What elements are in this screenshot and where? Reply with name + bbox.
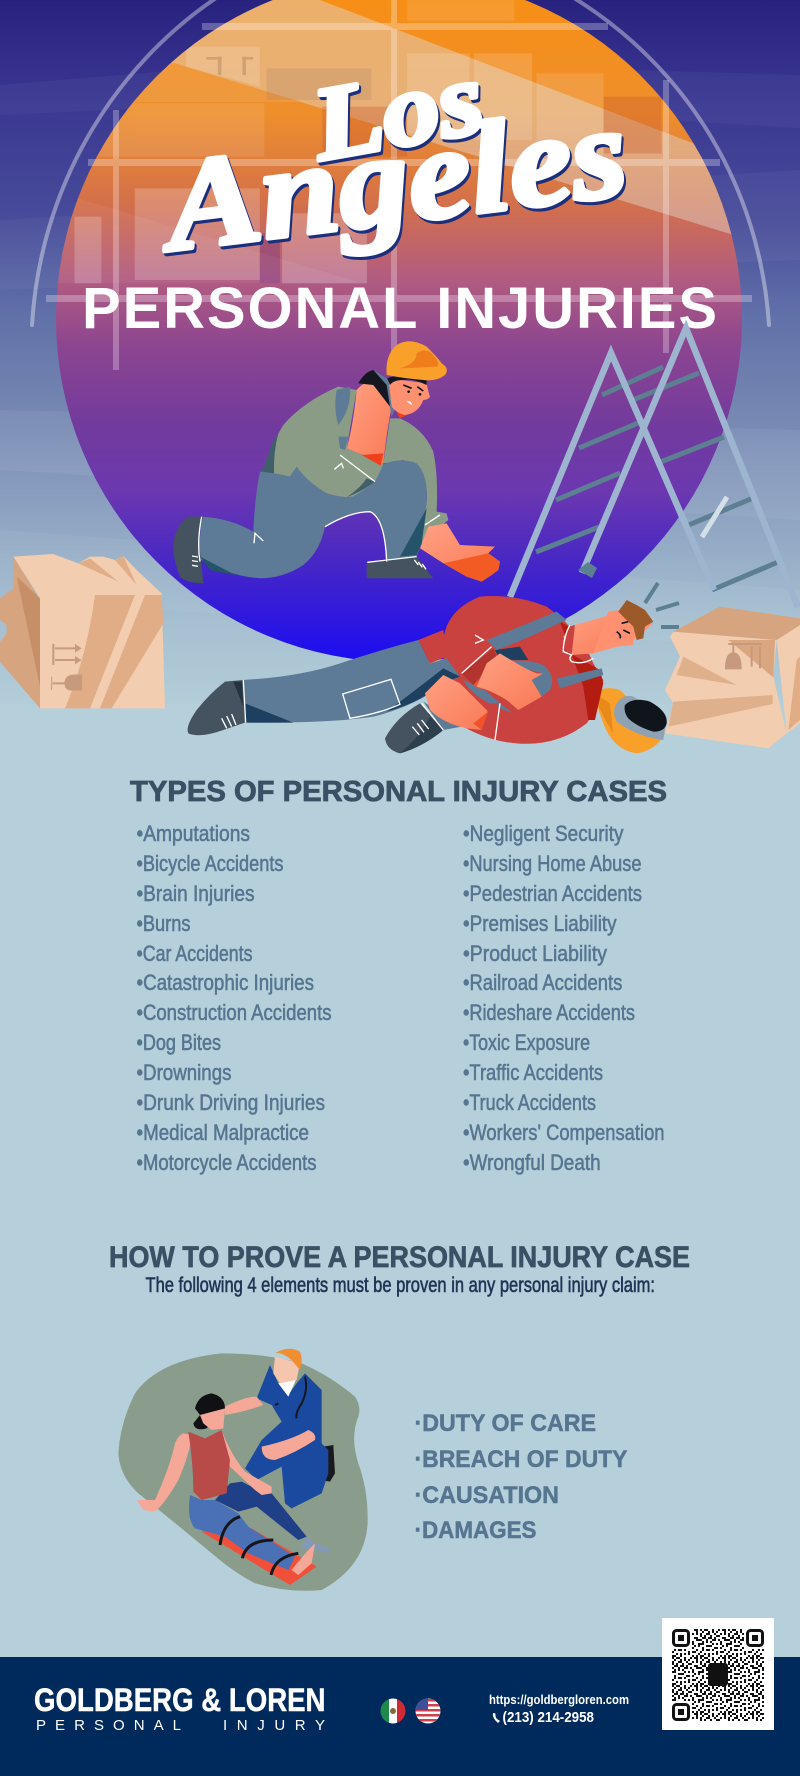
icon: Mexico flag	[380, 1698, 406, 1724]
woman shirt	[188, 1430, 230, 1500]
straps	[220, 1517, 298, 1575]
trousers	[243, 640, 460, 723]
list: injury types column two: •Pedestrian Accidents	[463, 881, 642, 906]
contact: website: https://goldbergloren.com	[489, 1692, 629, 1707]
splinted leg	[189, 1495, 295, 1570]
list: injury types column one	[136, 821, 332, 1175]
list: four elements: ·DUTY OF CARE	[414, 1410, 596, 1437]
list: injury types column two: •Premises Liability	[463, 911, 617, 936]
illustration: kneeling worker on phone	[173, 341, 500, 583]
list: injury types column one: •Brain Injuries	[136, 881, 254, 906]
woman arms	[137, 1433, 192, 1512]
medic body	[245, 1365, 328, 1508]
illustration: cardboard box right	[665, 607, 800, 748]
list: injury types column one: •Motorcycle Accidents	[136, 1150, 316, 1175]
upper arm	[477, 653, 543, 710]
right hand	[420, 523, 500, 582]
list: injury types column one: •Drownings	[136, 1060, 232, 1085]
logo: Goldberg & Loren: GOLDBERG & LOREN	[34, 1682, 326, 1718]
bent leg	[215, 1482, 307, 1540]
logo: Goldberg & Loren	[34, 1682, 326, 1734]
list: injury types column one: •Car Accidents	[136, 941, 252, 966]
suspenders	[495, 647, 528, 660]
heading: how to prove a personal injury case: HOW TO PROVE A PERSONAL INJURY CASE	[109, 1241, 690, 1274]
list: injury types column two: •Truck Accidents	[463, 1090, 596, 1115]
lower arm	[425, 675, 488, 730]
illustration: cardboard box left	[0, 554, 165, 708]
list: injury types column two: •Rideshare Accidents	[463, 1000, 635, 1025]
logo: Goldberg & Loren: INJURY	[223, 1717, 325, 1734]
stethoscope	[275, 1377, 306, 1418]
far boot	[188, 680, 245, 735]
neck and head	[563, 615, 627, 655]
list: injury types column two: •Railroad Accidents	[463, 970, 622, 995]
medic arms	[225, 1397, 263, 1415]
list: injury types column two: •Negligent Security	[463, 821, 624, 846]
list: injury types column two	[463, 821, 664, 1175]
list: injury types column one: •Construction Accidents	[136, 1000, 332, 1025]
boots	[173, 517, 203, 583]
panel: sunset circle with warehouse shelves	[32, 0, 769, 662]
title: Los Angeles: Los	[303, 40, 491, 183]
heading: types of personal injury cases: TYPES OF PERSONAL INJURY CASES	[130, 776, 667, 808]
list: injury types column one: •Medical Malpractice	[136, 1120, 309, 1145]
QR code	[662, 1618, 774, 1730]
icon: phone	[493, 1713, 500, 1723]
list: four elements: ·DAMAGES	[414, 1517, 536, 1544]
logo: Goldberg & Loren: PERSONAL	[36, 1717, 181, 1734]
list: injury types column two: •Workers' Compensation	[463, 1120, 664, 1145]
list: injury types column one: •Bicycle Accidents	[136, 851, 284, 876]
splint	[202, 1528, 317, 1585]
list: injury types column two: •Product Liability	[463, 941, 607, 966]
blob backdrop	[118, 1353, 368, 1591]
list: injury types column two: •Traffic Accidents	[463, 1060, 603, 1085]
heading: Personal Injuries: PERSONAL INJURIES	[82, 276, 717, 341]
illustration: medic helping injured woman	[118, 1349, 368, 1591]
hard hat	[386, 341, 447, 380]
near boot	[423, 702, 462, 730]
list: injury types column two: •Wrongful Death	[463, 1150, 601, 1175]
right shirt	[383, 418, 448, 543]
list: four elements	[414, 1410, 628, 1544]
trousers	[198, 460, 427, 578]
illustration: injured worker on ground	[188, 596, 667, 753]
medic head	[278, 1378, 297, 1397]
garment lines	[199, 455, 440, 562]
list: injury types column one: •Drunk Driving Injuries	[136, 1090, 325, 1115]
illustration: fallen ladder	[510, 328, 798, 627]
subheading: four elements: The following 4 elements must be proven in any personal injury claim:	[146, 1274, 655, 1297]
list: four elements: ·BREACH OF DUTY	[414, 1446, 628, 1473]
raised arm	[347, 382, 392, 463]
list: injury types column one: •Amputations	[136, 821, 250, 846]
stomach	[502, 661, 552, 697]
foot	[292, 1543, 315, 1575]
icon: United States flag	[415, 1698, 441, 1724]
head	[397, 412, 410, 418]
list: four elements: ·CAUSATION	[414, 1482, 559, 1509]
title: Los Angeles: Angeles	[150, 80, 634, 280]
torso	[443, 596, 603, 744]
list: injury types column one: •Catastrophic Injuries	[136, 970, 314, 995]
white lines	[243, 635, 500, 740]
contact: phone number: (213) 214-2958	[502, 1709, 594, 1726]
list: injury types column two: •Nursing Home Abuse	[463, 851, 642, 876]
list: injury types column one: •Dog Bites	[136, 1030, 221, 1055]
medic boot	[320, 1445, 335, 1482]
phone	[373, 370, 400, 417]
woman hair and face	[193, 1393, 225, 1429]
panel: footer	[0, 1618, 800, 1776]
shirt	[262, 387, 383, 497]
sleeve	[462, 648, 497, 685]
fallen hard hat	[595, 688, 665, 753]
list: injury types column two: •Toxic Exposure	[463, 1030, 590, 1055]
list: injury types column one: •Burns	[136, 911, 190, 936]
